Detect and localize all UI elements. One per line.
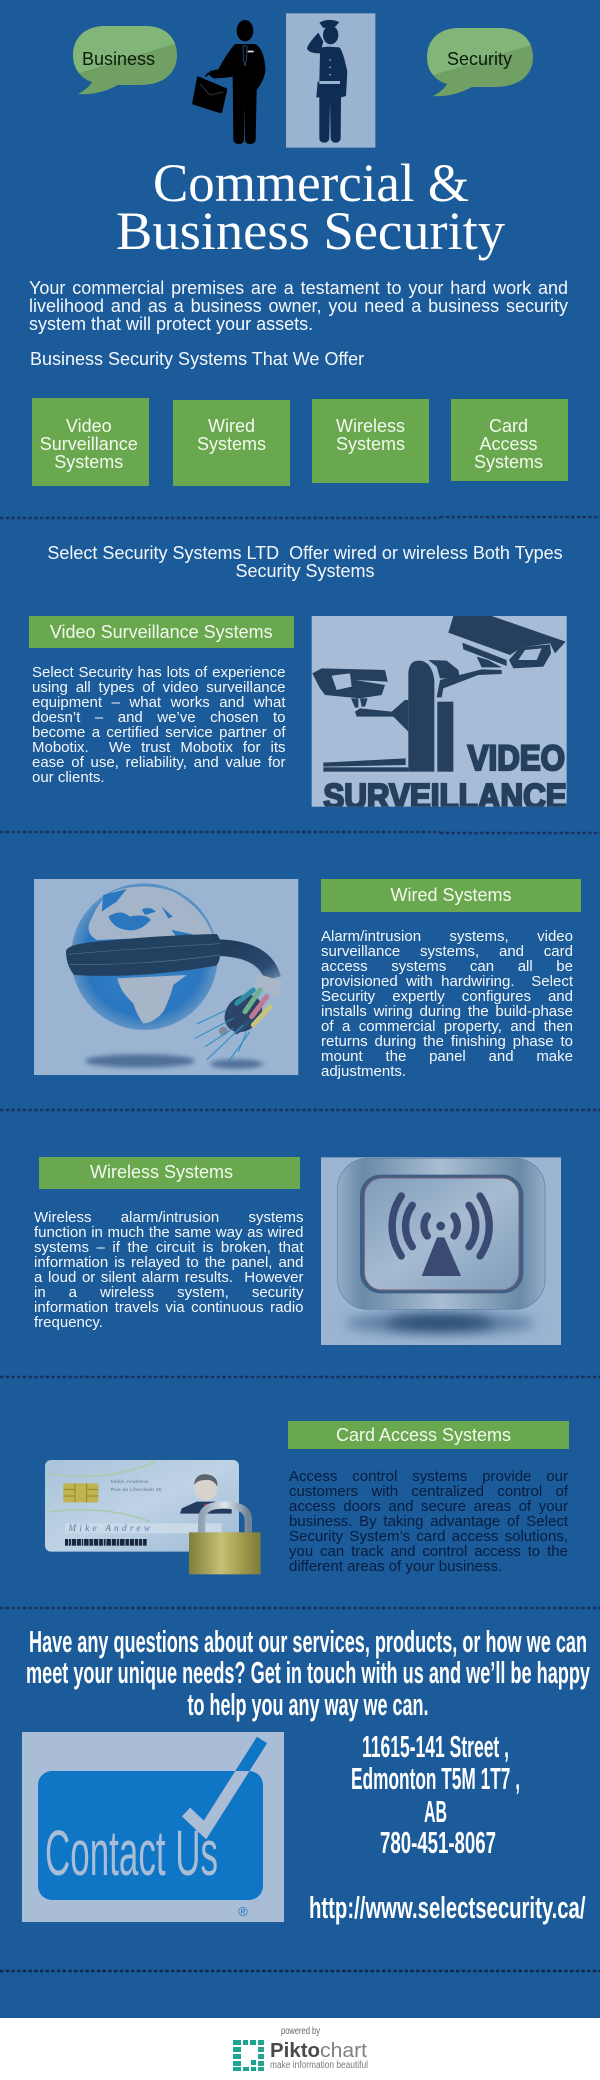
paragraph: wireless systems: frequency. [34,1314,103,1331]
speech bubble: Business: Business [82,49,155,69]
image: globe wrapped in fibre cable [34,879,298,1075]
service box: card access: Access [479,434,538,454]
image: video surveillance cameras: VIDEO [468,739,565,778]
subheading: systems offered: Business Security Systems That We Offer [30,349,364,369]
speech bubble: Business [73,26,177,94]
paragraph: wired systems [321,928,573,1080]
image: contact us: ® [238,1904,248,1919]
paragraph: wireless systems: systems – if the circuit is broken, that [34,1239,304,1256]
service box: video surveillance: Systems [54,452,123,472]
header: wireless systems: Wireless Systems [90,1162,233,1182]
paragraph: wired systems: of a commercial property, and then [321,1018,573,1035]
title: Commercial & [153,153,469,213]
header: video surveillance [29,616,294,648]
section intro heading: Select Security Systems LTD Offer wired or wireless Both Types Security Systems [47,543,563,581]
image: video surveillance cameras [312,616,567,807]
paragraph: wireless systems: information travels via continuous radio [34,1299,304,1316]
intro text: system that will protect your assets. [29,314,313,334]
header: wired systems [321,878,581,912]
paragraph: wired systems: provisioned with hardwiring. Select [321,973,573,990]
paragraph: card access systems: access doors and secure areas of your [289,1498,568,1515]
service box: wireless [312,399,429,483]
service box: card access: Systems [474,452,543,472]
service box: video surveillance: Surveillance [40,434,138,454]
contact details: AB [424,1794,447,1829]
paragraph: wireless systems [34,1209,304,1331]
service box: wired: Wired [208,416,255,436]
paragraph: wireless systems: a loud or silent alarm results. However [34,1269,304,1286]
service box: wired [173,400,290,486]
service box: video surveillance: Video [66,416,112,436]
paragraph: video surveillance: equipment – what works and what [32,694,286,711]
paragraph: video surveillance [32,664,286,786]
image: ID card and padlock: Rue da Liberdade 25 [111,1487,162,1492]
service box: wireless: Wireless [336,416,405,436]
header: card access systems: Card Access Systems [336,1425,511,1445]
service box: card access: Card [489,416,528,436]
footer: powered by Piktochart: chart [320,2040,367,2062]
paragraph: wired systems: access systems can all be [321,958,573,975]
paragraph: wired systems: Alarm/intrusion systems, video [321,928,573,945]
speech bubble: Security [427,28,533,96]
paragraph: card access systems: Access control systems provide our [289,1468,568,1485]
paragraph: wired systems: installs wiring during the build-phase [321,1003,573,1020]
paragraph: wired systems: returns during the finishing phase to [321,1033,573,1050]
image: ID card and padlock: Mike Andrew [111,1479,150,1484]
service box: video surveillance [32,398,148,486]
paragraph: card access systems [289,1468,568,1575]
paragraph: video surveillance: our clients. [32,769,105,786]
intro text: Your commercial premises are a testament to your hard work and [29,278,568,298]
intro text: livelihood and as a business owner, you need a business security [29,296,568,316]
header: wired systems: Wired Systems [390,884,512,904]
icon: businessman with briefcase [192,20,266,144]
paragraph: wired systems: Security expertly configures and [321,988,573,1005]
contact details: 780-451-8067 [380,1825,496,1860]
paragraph: card access systems: business. By taking advantage of Select [289,1513,568,1530]
title [116,153,505,261]
image: wireless signal icon [321,1157,561,1345]
paragraph: video surveillance: Mobotix. We trust Mobotix for its [32,739,286,756]
paragraph: card access systems: different areas of your business. [289,1558,502,1575]
call to action: to help you any way we can. [188,1687,428,1722]
header: video surveillance: Video Surveillance Systems [50,622,273,642]
speech bubble: Security: Security [447,49,512,69]
paragraph: video surveillance: doesn’t – and we’ve chosen to [32,709,286,726]
paragraph: card access systems: Security System’s card access solutions, [289,1528,568,1545]
paragraph: wireless systems: in a wireless system, security [34,1284,304,1301]
paragraph: wired systems: surveillance systems, and card [321,943,573,960]
service box: card access [451,399,568,481]
paragraph: card access systems: you can track and control access to the [289,1543,568,1560]
title: Business Security [116,201,505,261]
image: ID card and padlock [45,1460,261,1574]
image: contact us [22,1732,284,1922]
header: wireless systems [39,1157,300,1189]
image: ID card and padlock: Mike Andrew [67,1524,151,1534]
footer: powered by Piktochart: make information beautiful [270,2060,368,2071]
intro text [29,278,568,334]
paragraph: card access systems: customers with centralized control of [289,1483,568,1500]
paragraph: wireless systems: information is relayed to the panel, and [34,1254,304,1271]
paragraph: video surveillance: ease of use, reliability, and value for [32,754,286,771]
call to action [26,1624,590,1722]
icon: Piktochart logo [233,2040,264,2071]
service box: wired: Systems [197,434,266,454]
paragraph: video surveillance: become a certified service partner of [32,724,286,741]
contact details [309,1730,586,1925]
paragraph: wired systems: mount the panel and make [321,1048,573,1065]
paragraph: wireless systems: function in much the same way as wired [34,1224,304,1241]
header: card access systems [288,1421,569,1449]
icon: security officer panel [286,13,376,148]
service box: wireless: Systems [336,434,405,454]
footer: powered by Piktochart [0,2018,600,2080]
footer: powered by Piktochart: powered by [281,2026,320,2037]
paragraph: wired systems: adjustments. [321,1063,406,1080]
footer: powered by Piktochart: Pikto [270,2040,320,2062]
paragraph: wireless systems: Wireless alarm/intrusion systems [34,1209,304,1226]
paragraph: video surveillance: using all types of video surveillance [32,679,286,696]
paragraph: video surveillance: Select Security has lots of experience [32,664,286,681]
